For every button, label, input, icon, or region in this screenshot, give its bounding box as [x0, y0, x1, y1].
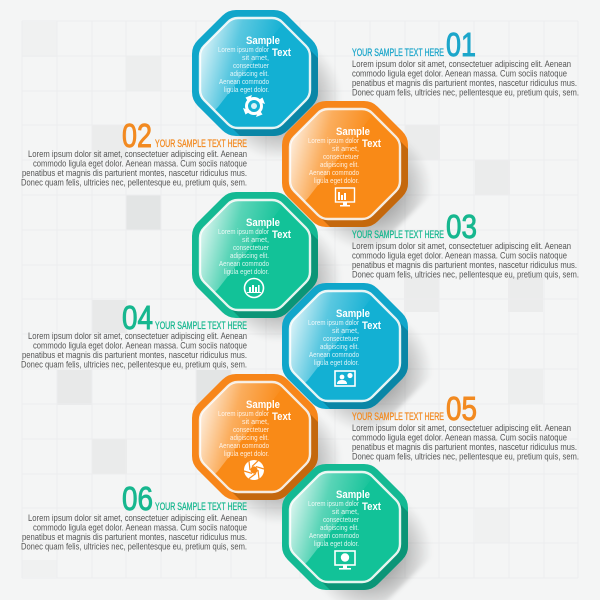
octagon 5: orange: adipiscing elit. — [230, 433, 269, 442]
text block 01: YOUR SAMPLE TEXT HERE — [352, 47, 444, 59]
icon: monitor with chart — [336, 188, 354, 206]
octagon 4: blue: Aenean commodo — [309, 350, 359, 359]
text block 03 — [352, 208, 579, 280]
text block 01 — [352, 26, 579, 98]
octagon 6: green: consectetuer — [323, 515, 359, 524]
text block 02 — [21, 117, 247, 188]
octagon 3: green: Lorem ipsum dolor — [218, 227, 269, 236]
octagon 5: orange: Aenean commodo — [219, 441, 269, 450]
text block 06 — [21, 480, 247, 552]
text block 02: Lorem ipsum dolor sit amet, consectetuer adipiscing elit. Aenean — [28, 148, 247, 159]
octagon 2: orange: Sample — [336, 126, 370, 138]
octagon 3: green: consectetuer — [233, 243, 269, 252]
octagon 4: blue: Text — [362, 320, 381, 332]
octagon 6: green: adipiscing elit. — [320, 523, 359, 532]
octagon 2: orange: Aenean commodo — [309, 168, 359, 177]
text block 04: Lorem ipsum dolor sit amet, consectetuer adipiscing elit. Aenean — [28, 330, 247, 341]
text block 02: commodo ligula eget dolor. Aenean massa. Cum sociis natoque — [33, 158, 247, 168]
octagon 6: green: Text — [362, 501, 381, 513]
octagon 5: orange: ligula eget dolor. — [224, 449, 269, 458]
octagon 1: blue: Sample — [246, 35, 280, 47]
octagon 1: blue: Lorem ipsum dolor — [218, 45, 269, 54]
icon: monitor with pie — [335, 551, 355, 570]
octagon 5: orange: consectetuer — [233, 425, 269, 434]
text block 02: 02 — [122, 117, 152, 154]
octagon 4: blue: Sample — [336, 308, 370, 320]
octagon 4: blue: Lorem ipsum dolor — [308, 318, 359, 327]
text block 06: 06 — [122, 480, 153, 517]
octagon 3: green: ligula eget dolor. — [224, 267, 269, 276]
text block 03: 03 — [446, 208, 477, 245]
octagon 2: orange: ligula eget dolor. — [314, 176, 359, 185]
octagon 3: green: sit amet, — [242, 235, 269, 244]
octagon 1: blue — [192, 10, 341, 159]
octagon 2: orange: consectetuer — [323, 152, 359, 161]
text block 02: YOUR SAMPLE TEXT HERE — [155, 138, 247, 150]
text block 05 — [352, 390, 579, 462]
octagon 5: orange: Text — [272, 411, 291, 423]
octagon 3: green: Text — [272, 229, 291, 241]
octagon 4: blue: consectetuer — [323, 334, 359, 343]
text block 04: YOUR SAMPLE TEXT HERE — [155, 320, 247, 332]
octagon 1: blue: consectetuer — [233, 61, 269, 70]
octagon 4: blue — [282, 283, 431, 432]
text block 06: penatibus et magnis dis parturient montes, nascetur ridiculus mus. — [22, 531, 247, 542]
octagon 3: green: adipiscing elit. — [230, 251, 269, 260]
octagon 3: green: Aenean commodo — [219, 259, 269, 268]
text block 06: Lorem ipsum dolor sit amet, consectetuer adipiscing elit. Aenean — [28, 512, 247, 523]
text block 02: penatibus et magnis dis parturient montes, nascetur ridiculus mus. — [22, 167, 247, 178]
text block 05: YOUR SAMPLE TEXT HERE — [352, 411, 444, 423]
text block 06: Donec quam felis, ultricies nec, pellentesque eu, pretium quis, sem. — [21, 540, 247, 552]
text block 02: Donec quam felis, ultricies nec, pellentesque eu, pretium quis, sem. — [21, 176, 247, 188]
octagon 6: green: Sample — [336, 489, 370, 501]
text block 01: 01 — [446, 26, 476, 63]
octagon 6: green: Lorem ipsum dolor — [308, 499, 359, 508]
text block 06: commodo ligula eget dolor. Aenean massa. Cum sociis natoque — [33, 522, 247, 532]
octagon 2: orange: Lorem ipsum dolor — [308, 136, 359, 145]
octagon 5: orange: Sample — [246, 399, 280, 411]
octagon 4: blue: sit amet, — [332, 326, 359, 335]
octagon 5: orange: sit amet, — [242, 417, 269, 426]
text block 03: YOUR SAMPLE TEXT HERE — [352, 229, 444, 241]
icon: camera aperture — [244, 460, 264, 480]
text block 04 — [21, 299, 247, 370]
text block 04: Donec quam felis, ultricies nec, pellentesque eu, pretium quis, sem. — [21, 358, 247, 370]
icon: screen with presenter — [335, 371, 355, 386]
octagon 6: green: sit amet, — [332, 507, 359, 516]
octagon 5: orange — [192, 374, 341, 523]
octagon 1: blue: ligula eget dolor. — [224, 85, 269, 94]
text block 04: commodo ligula eget dolor. Aenean massa. Cum sociis natoque — [33, 340, 247, 350]
octagon 6: green: Aenean commodo — [309, 531, 359, 540]
icon: circle with bars — [244, 278, 264, 298]
octagon 3: green — [192, 192, 341, 341]
text block 05: 05 — [446, 390, 477, 427]
octagon 5: orange: Lorem ipsum dolor — [218, 409, 269, 418]
text block 06: YOUR SAMPLE TEXT HERE — [155, 501, 247, 513]
octagon 2: orange — [282, 101, 431, 250]
octagon 1: blue: adipiscing elit. — [230, 69, 269, 78]
octagon 4: blue: ligula eget dolor. — [314, 358, 359, 367]
text block 04: penatibus et magnis dis parturient montes, nascetur ridiculus mus. — [22, 349, 247, 360]
octagon 3: green: Sample — [246, 217, 280, 229]
icon: circular arrows — [243, 95, 265, 117]
octagon 2: orange: adipiscing elit. — [320, 160, 359, 169]
octagon 1: blue: sit amet, — [242, 53, 269, 62]
octagon 1: blue: Aenean commodo — [219, 77, 269, 86]
octagon 1: blue: Text — [272, 47, 291, 59]
text block 04: 04 — [122, 299, 153, 336]
octagon 2: orange: sit amet, — [332, 144, 359, 153]
octagon 6: green — [282, 464, 431, 600]
octagon 6: green: ligula eget dolor. — [314, 539, 359, 548]
octagon 2: orange: Text — [362, 138, 381, 150]
octagon 4: blue: adipiscing elit. — [320, 342, 359, 351]
